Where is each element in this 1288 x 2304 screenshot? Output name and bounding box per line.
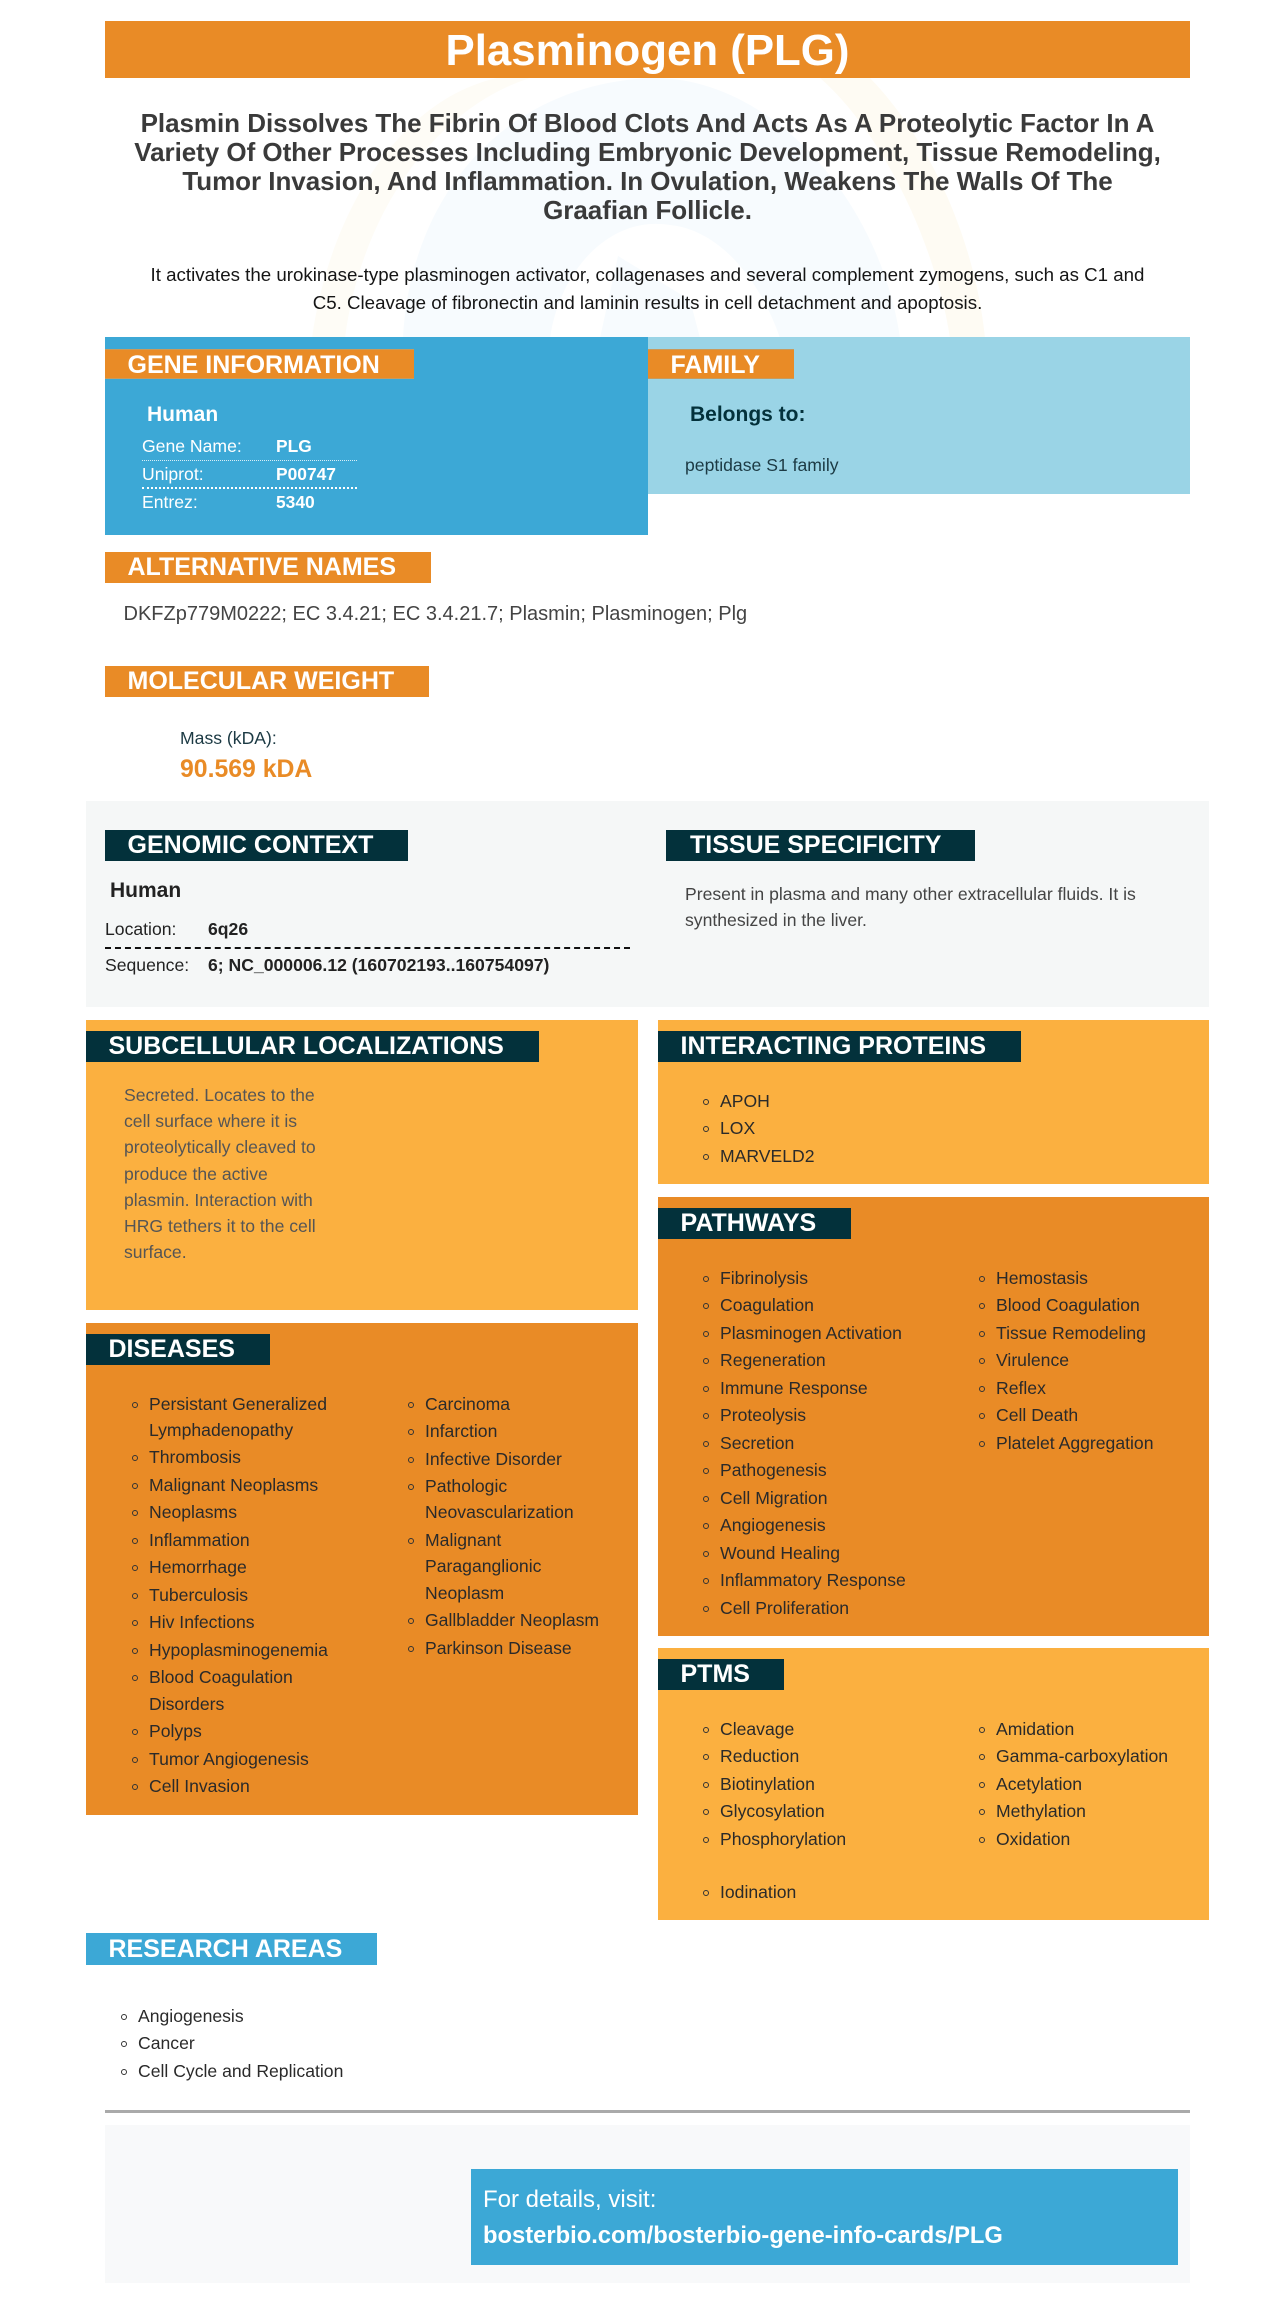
- interacting proteins list: [703, 1090, 815, 1166]
- PTMs list column 2: Acetylation: [996, 1774, 1082, 1794]
- heading: interacting proteins: INTERACTING PROTEINS: [680, 1032, 986, 1060]
- research areas list: Angiogenesis: [138, 2006, 244, 2026]
- pathways list column 1: Wound Healing: [720, 1542, 840, 1562]
- family value: peptidase S1 family: [685, 455, 839, 475]
- PTMs list column 2: Amidation: [996, 1718, 1074, 1738]
- tissue specificity text: synthesized in the liver.: [685, 910, 867, 930]
- panel: footer: [105, 2125, 1190, 2283]
- diseases list column 2: Neoplasm: [425, 1583, 504, 1603]
- mass value: 90.569 kDA: [180, 756, 312, 782]
- PTMs list column 1: Glycosylation: [720, 1801, 825, 1821]
- pathways list column 1: Cell Proliferation: [720, 1598, 849, 1618]
- location row: Location:: [105, 919, 176, 939]
- pathways list column 2: Reflex: [996, 1378, 1046, 1398]
- alternative names text: DKFZp779M0222; EC 3.4.21; EC 3.4.21.7; Plasmin; Plasminogen; Plg: [124, 603, 747, 625]
- entrez row: 5340: [276, 492, 315, 512]
- diseases list column 1: Malignant Neoplasms: [149, 1475, 318, 1495]
- diseases list column 2: Gallbladder Neoplasm: [425, 1610, 599, 1630]
- PTMs list column 1: Cleavage: [720, 1718, 794, 1738]
- heading: alternative names: ALTERNATIVE NAMES: [128, 553, 396, 581]
- pathways list column 1: Regeneration: [720, 1350, 826, 1370]
- heading: PTMs: PTMS: [680, 1660, 750, 1688]
- pathways list column 1: Proteolysis: [720, 1405, 806, 1425]
- uniprot row: Uniprot:: [142, 464, 204, 484]
- PTMs list column 2: Methylation: [996, 1801, 1086, 1821]
- entrez row: [142, 492, 315, 512]
- pathways list column 2: Platelet Aggregation: [996, 1432, 1153, 1452]
- subcellular text: [124, 1085, 316, 1262]
- diseases list column 2: Malignant: [425, 1530, 501, 1550]
- heading: PTMs: [658, 1659, 784, 1690]
- heading: research areas: RESEARCH AREAS: [108, 1935, 342, 1963]
- heading: family: FAMILY: [670, 351, 760, 379]
- panel: pathways: [658, 1197, 1209, 1636]
- subcellular text: Secreted. Locates to the: [124, 1085, 315, 1105]
- diseases list column 2: Paraganglionic: [425, 1556, 541, 1576]
- pathways list column 2: Cell Death: [996, 1405, 1078, 1425]
- diseases list column 1: Disorders: [149, 1694, 224, 1714]
- panel: subcellular localizations: [86, 1020, 638, 1310]
- pathways list column 1: Pathogenesis: [720, 1460, 827, 1480]
- PTMs list column 1: Biotinylation: [720, 1774, 815, 1794]
- diseases list column 1: Thrombosis: [149, 1447, 241, 1467]
- research areas list: [121, 2006, 343, 2080]
- research areas list: Cancer: [138, 2033, 195, 2053]
- subcellular text: proteolytically cleaved to: [124, 1137, 316, 1157]
- heading: tissue specificity: TISSUE SPECIFICITY: [690, 831, 941, 859]
- belongs to label: Belongs to:: [690, 403, 806, 426]
- diseases list column 1: [132, 1394, 328, 1796]
- title banner: [105, 21, 1190, 78]
- heading: gene information: GENE INFORMATION: [128, 351, 380, 379]
- PTMs list column 2: [979, 1718, 1168, 1848]
- sequence row: [105, 955, 549, 975]
- diseases list column 2: Parkinson Disease: [425, 1638, 572, 1658]
- heading: family: [648, 349, 794, 379]
- panel: family: [648, 337, 1190, 494]
- pathways list column 2: Blood Coagulation: [996, 1295, 1140, 1315]
- diseases list column 1: Persistant Generalized: [149, 1394, 327, 1414]
- PTMs list column 2: Oxidation: [996, 1828, 1070, 1848]
- diseases list column 1: Tuberculosis: [149, 1585, 248, 1605]
- pathways list column 2: Tissue Remodeling: [996, 1322, 1146, 1342]
- summary heading: Variety Of Other Processes Including Embryonic Development, Tissue Remodeling,: [134, 137, 1161, 167]
- diseases list column 2: Infarction: [425, 1421, 497, 1441]
- callout url: bosterbio.com/bosterbio-gene-info-cards/PLG: [483, 2222, 1003, 2248]
- diseases list column 1: Inflammation: [149, 1530, 250, 1550]
- subcellular text: surface.: [124, 1242, 187, 1262]
- summary heading: Plasmin Dissolves The Fibrin Of Blood Clots And Acts As A Proteolytic Factor In A: [141, 108, 1154, 138]
- pathways list column 2: [979, 1268, 1153, 1452]
- pathways list column 1: Inflammatory Response: [720, 1570, 906, 1590]
- PTMs list column 1: Reduction: [720, 1746, 799, 1766]
- subcellular text: cell surface where it is: [124, 1111, 297, 1131]
- location row: [105, 918, 630, 949]
- heading: diseases: DISEASES: [108, 1335, 235, 1363]
- gene name row: [142, 435, 357, 461]
- entrez row: Entrez:: [142, 492, 198, 512]
- diseases list column 1: Cell Invasion: [149, 1776, 250, 1796]
- species label: Human: [147, 403, 218, 426]
- panel: diseases: [86, 1323, 638, 1815]
- diseases list column 2: [408, 1394, 599, 1658]
- description text: It activates the urokinase-type plasminogen activator, collagenases and several complement zymogens, such as C1 and: [151, 264, 1144, 285]
- heading: molecular weight: MOLECULAR WEIGHT: [128, 667, 394, 695]
- PTMs list column 1: Phosphorylation: [720, 1828, 846, 1848]
- panel: genomic context and tissue specificity: 6; NC_000006.12 (160702193..160754097): [208, 955, 549, 975]
- summary heading: Tumor Invasion, And Inflammation. In Ovulation, Weakens The Walls Of The: [182, 166, 1113, 196]
- pathways list column 1: Secretion: [720, 1432, 794, 1452]
- uniprot row: [142, 463, 357, 489]
- callout label: For details, visit:: [483, 2186, 656, 2212]
- summary heading: [134, 108, 1161, 225]
- tissue specificity text: Present in plasma and many other extracellular fluids. It is: [685, 884, 1136, 904]
- heading: diseases: [86, 1334, 270, 1365]
- diseases list column 1: Hiv Infections: [149, 1612, 255, 1632]
- description text: C5. Cleavage of fibronectin and laminin results in cell detachment and apoptosis.: [313, 292, 982, 313]
- watermark logo: [312, 78, 985, 337]
- pathways list column 1: Angiogenesis: [720, 1515, 826, 1535]
- diseases list column 1: Neoplasms: [149, 1502, 237, 1522]
- diseases list column 2: Neovascularization: [425, 1502, 574, 1522]
- research areas list: Cell Cycle and Replication: [138, 2060, 343, 2080]
- interacting proteins list: LOX: [720, 1118, 755, 1138]
- tissue specificity text: [685, 884, 1136, 930]
- pathways list column 1: Fibrinolysis: [720, 1268, 808, 1288]
- uniprot row: P00747: [276, 464, 336, 484]
- diseases list column 1: Hemorrhage: [149, 1557, 247, 1577]
- panel: PTMs: [658, 1648, 1209, 1920]
- gene name row: PLG: [276, 436, 312, 456]
- diseases list column 2: Carcinoma: [425, 1394, 510, 1414]
- title banner: Plasminogen (PLG): [446, 26, 849, 75]
- diseases list column 2: Pathologic: [425, 1476, 507, 1496]
- panel: interacting proteins: [658, 1020, 1209, 1184]
- summary heading: Graafian Follicle.: [543, 195, 752, 225]
- pathways list column 1: Plasminogen Activation: [720, 1322, 902, 1342]
- diseases list column 2: Infective Disorder: [425, 1448, 562, 1468]
- heading: pathways: [658, 1208, 851, 1239]
- PTMs list column 2: Gamma-carboxylation: [996, 1746, 1168, 1766]
- heading: pathways: PATHWAYS: [680, 1209, 816, 1237]
- pathways list column 1: Cell Migration: [720, 1488, 828, 1508]
- heading: subcellular localizations: SUBCELLULAR LOCALIZATIONS: [108, 1032, 504, 1060]
- subcellular text: produce the active: [124, 1164, 268, 1184]
- diseases list column 1: Hypoplasminogenemia: [149, 1640, 328, 1660]
- callout: details link: [471, 2169, 1178, 2265]
- species label: Human: [110, 879, 181, 902]
- pathways list column 1: Coagulation: [720, 1295, 814, 1315]
- subcellular text: plasmin. Interaction with: [124, 1190, 313, 1210]
- panel: genomic context and tissue specificity: [86, 801, 1209, 1007]
- PTMs list column 1: [703, 1718, 846, 1848]
- mass label: Mass (kDA):: [180, 728, 277, 748]
- heading: genomic context: GENOMIC CONTEXT: [128, 831, 373, 859]
- location row: 6q26: [208, 919, 248, 939]
- diseases list column 1: Blood Coagulation: [149, 1667, 293, 1687]
- PTMs list extra item: Iodination: [720, 1882, 796, 1902]
- panel: gene information: [105, 337, 648, 535]
- diseases list column 1: Tumor Angiogenesis: [149, 1749, 309, 1769]
- pathways list column 2: Hemostasis: [996, 1268, 1088, 1288]
- subcellular text: HRG tethers it to the cell: [124, 1216, 316, 1236]
- diseases list column 1: Lymphadenopathy: [149, 1420, 293, 1440]
- pathways list column 1: Immune Response: [720, 1378, 868, 1398]
- pathways list column 2: Virulence: [996, 1350, 1069, 1370]
- sequence row: Sequence:: [105, 955, 189, 975]
- diseases list column 1: Polyps: [149, 1721, 202, 1741]
- description text: [151, 264, 1144, 313]
- pathways list column 1: [703, 1268, 906, 1618]
- gene name row: Gene Name:: [142, 436, 242, 456]
- interacting proteins list: MARVELD2: [720, 1146, 815, 1166]
- interacting proteins list: APOH: [720, 1090, 770, 1110]
